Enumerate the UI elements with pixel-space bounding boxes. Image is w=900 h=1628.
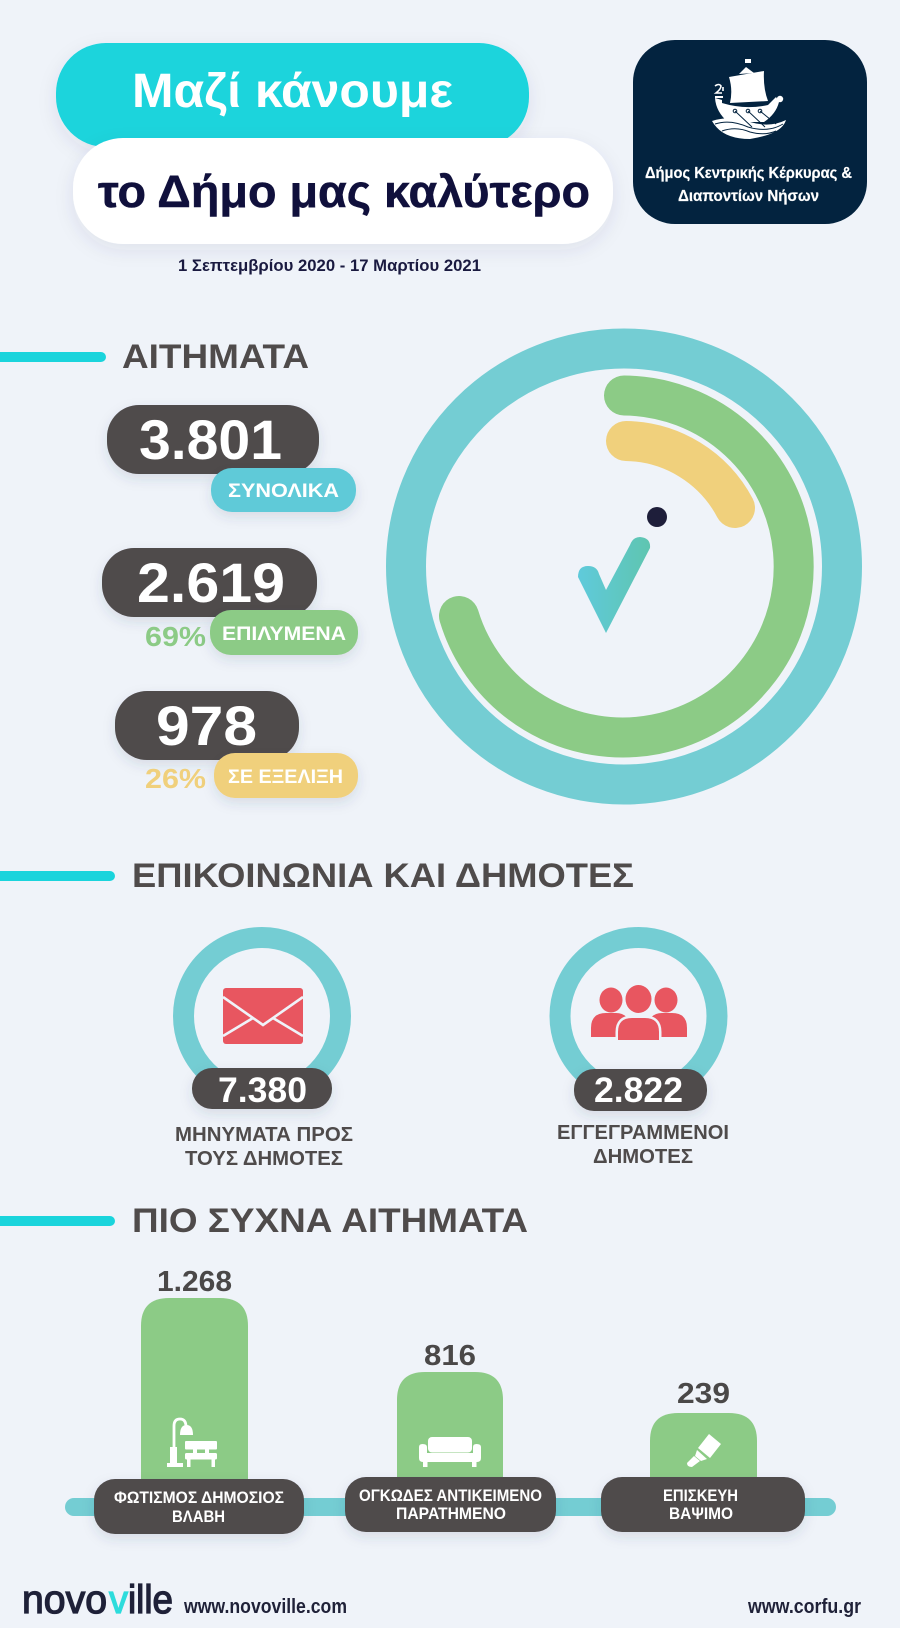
bar: bulky items: 816 [424, 1340, 476, 1372]
arc: in progress [626, 441, 735, 508]
bar: lighting: ΦΩΤΙΣΜΟΣ ΔΗΜΟΣΙΟΣ [114, 1488, 284, 1507]
stat: registered citizens [557, 938, 729, 1168]
radial chart [406, 348, 842, 784]
stat: messages [175, 938, 353, 1170]
icon: people [591, 985, 687, 1040]
heading: ΕΠΙΚΟΙΝΩΝΙΑ ΚΑΙ ΔΗΜΟΤΕΣ [132, 857, 634, 895]
stat: messages: 7.380 [218, 1071, 307, 1110]
logo caption: Δήμος Κεντρικής Κέρκυρας & [645, 165, 852, 182]
bar: lighting: 1.268 [157, 1266, 232, 1298]
bar: bulky items: ΟΓΚΩΔΕΣ ΑΝΤΙΚΕΙΜΕΝΟ [359, 1486, 542, 1505]
novoville logo: v [109, 1578, 128, 1622]
heading: ΠΙΟ ΣΥΧΝΑ ΑΙΤΗΜΑΤΑ [132, 1202, 528, 1240]
stat: resolved: 69% [145, 621, 206, 652]
icon: paint brush [687, 1434, 721, 1467]
stat: resolved [102, 548, 358, 655]
dot [647, 507, 667, 527]
stat: resolved: 2.619 [137, 551, 285, 614]
icon: sofa [419, 1437, 481, 1467]
date range: 1 Σεπτεμβρίου 2020 - 17 Μαρτίου 2021 [178, 257, 481, 275]
municipality logo panel [633, 40, 867, 224]
icon: ship [712, 59, 786, 139]
corfu url: www.corfu.gr [747, 1596, 861, 1618]
logo caption [645, 165, 852, 205]
section: communication [0, 857, 729, 1170]
bar: lighting [94, 1266, 304, 1534]
heading bar [0, 1216, 115, 1226]
novoville logo: novo [22, 1578, 107, 1622]
bar: bulky items [345, 1340, 556, 1532]
bar: lighting: ΒΛΑΒΗ [172, 1507, 225, 1526]
icon: envelope [223, 988, 303, 1044]
novoville logo: ille [128, 1578, 173, 1622]
title pill: cyan [56, 43, 529, 147]
logo caption: Διαποντίων Νήσων [678, 188, 819, 205]
footer [22, 1578, 861, 1622]
heading: ΑΙΤΗΜΑΤΑ [122, 338, 309, 376]
icon: street lamp and bench [167, 1419, 217, 1467]
heading bar [0, 352, 106, 362]
title pill: white: το Δήμο μας καλύτερο [98, 166, 590, 217]
section: most frequent requests [0, 1202, 836, 1534]
chart track [65, 1498, 836, 1516]
bar: painting [601, 1378, 805, 1532]
stat: in progress: ΣΕ ΕΞΕΛΙΞΗ [228, 767, 343, 788]
stat: registered citizens: 2.822 [594, 1071, 683, 1110]
arc: resolved [459, 396, 794, 737]
bar: bulky items: ΠΑΡΑΤΗΜΕΝΟ [396, 1504, 506, 1523]
stat: messages: ΜΗΝΥΜΑΤΑ ΠΡΟΣ [175, 1124, 353, 1146]
section: requests [0, 338, 842, 798]
stat: total [107, 405, 356, 512]
stat: resolved: ΕΠΙΛΥΜΕΝΑ [222, 624, 346, 645]
stat: total: ΣΥΝΟΛΙΚΑ [228, 481, 339, 502]
bar: painting: ΕΠΙΣΚΕΥΗ [663, 1486, 738, 1505]
stat: in progress [115, 691, 358, 798]
novoville url: www.novoville.com [183, 1596, 347, 1618]
icon: check mark [578, 537, 650, 633]
stat: registered citizens: ΕΓΓΕΓΡΑΜΜΕΝΟΙ [557, 1122, 729, 1144]
bar: painting: 239 [677, 1378, 730, 1410]
stat: total: 3.801 [139, 408, 282, 471]
title pill: cyan: Μαζί κάνουμε [132, 65, 453, 118]
title pill: white [73, 138, 613, 244]
stat: in progress: 978 [156, 694, 257, 757]
heading bar [0, 871, 115, 881]
stat: messages: ΤΟΥΣ ΔΗΜΟΤΕΣ [185, 1148, 343, 1170]
stat: registered citizens: ΔΗΜΟΤΕΣ [593, 1146, 693, 1168]
stat: in progress: 26% [145, 763, 206, 794]
bar: painting: ΒΑΨΙΜΟ [669, 1504, 733, 1523]
header title [56, 43, 613, 275]
